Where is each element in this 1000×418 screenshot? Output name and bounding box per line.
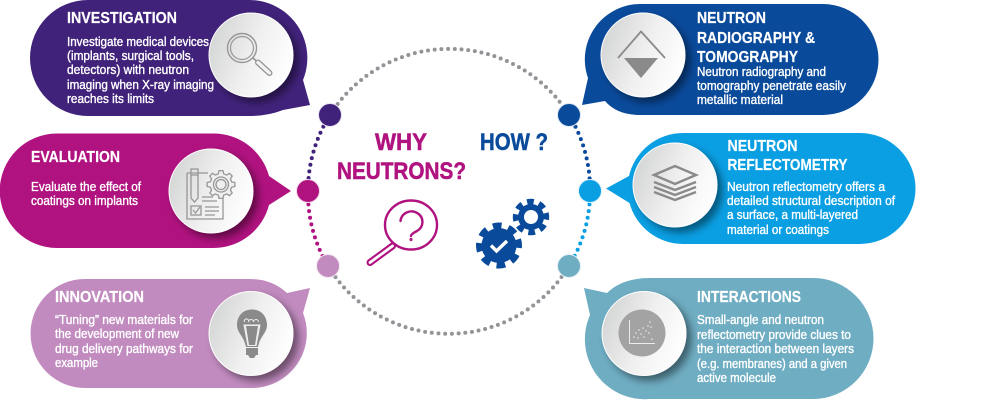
text: innovation body: “Tuning” new materials for	[55, 313, 193, 327]
text: reflectometry body: a surface, a multi-layered	[727, 208, 858, 222]
icon: magnifier with question mark	[370, 200, 437, 262]
text: investigation body	[67, 35, 214, 106]
icon: light bulb	[237, 310, 267, 358]
panel: evaluation	[0, 133, 291, 248]
text: interactions body: reflectometry provide clues to	[697, 328, 851, 342]
heading: reflectometry: NEUTRON	[728, 138, 798, 155]
text: interactions body: (e.g. membranes) and a given	[697, 357, 847, 371]
text: evaluation body	[31, 180, 141, 208]
panel: interactions	[584, 278, 873, 399]
heading: reflectometry: REFLECTOMETRY	[728, 157, 848, 174]
panel: innovation	[31, 279, 310, 388]
text: investigation body: detectors) with neutron	[67, 63, 189, 77]
heading: radiography and tomography: RADIOGRAPHY &	[697, 30, 815, 47]
node: evaluation	[296, 180, 320, 202]
text: innovation body: drug delivery pathways for	[55, 342, 193, 356]
icon: checklist and gear	[187, 169, 235, 219]
heading: how: HOW ?	[480, 129, 548, 156]
text: interactions body	[697, 313, 854, 385]
heading: radiography and tomography	[697, 10, 815, 66]
text: interactions body: active molecule	[697, 371, 776, 385]
icon: diamond triangles	[618, 32, 665, 78]
disc: interactions	[602, 292, 686, 376]
icon: gears with check mark	[474, 199, 549, 270]
heading: why neutrons: WHY	[375, 129, 427, 156]
heading: why neutrons	[337, 129, 466, 185]
text: innovation body	[55, 313, 193, 370]
text: innovation body: example	[55, 356, 98, 370]
icon: stacked layers	[654, 166, 696, 200]
heading: radiography and tomography: NEUTRON	[697, 10, 766, 27]
text: reflectometry body	[727, 180, 895, 237]
disc: radiography	[601, 13, 685, 97]
disc: innovation	[209, 292, 293, 376]
text: investigation body: imaging when X-ray imaging	[67, 78, 214, 92]
disc: reflectometry	[633, 143, 717, 227]
node: reflectometry	[578, 180, 602, 202]
text: radiography body: tomography penetrate easily	[697, 79, 847, 93]
heading: investigation: INVESTIGATION	[67, 10, 177, 27]
node: radiography	[558, 104, 580, 126]
text: radiography body	[697, 65, 847, 107]
node: interactions	[558, 254, 580, 278]
text: innovation body: the development of new	[55, 327, 180, 341]
dotted ring	[308, 49, 590, 334]
text: reflectometry body: detailed structural description of	[727, 194, 895, 208]
panel: radiography and tomography	[582, 4, 878, 115]
text: radiography body: metallic material	[697, 93, 783, 107]
node: innovation	[316, 254, 340, 278]
text: evaluation body: coatings on implants	[31, 194, 138, 208]
panel: investigation	[30, 0, 310, 116]
text: interactions body: Small-angle and neutron	[697, 313, 824, 327]
text: investigation body: reaches its limits	[67, 92, 154, 106]
heading: reflectometry	[728, 138, 848, 174]
heading: radiography and tomography: TOMOGRAPHY	[697, 49, 799, 66]
disc: evaluation	[169, 149, 253, 233]
disc: investigation	[209, 13, 293, 97]
text: reflectometry body: Neutron reflectometry offers a	[727, 180, 885, 194]
text: interactions body: the interaction between layers	[697, 342, 854, 356]
text: investigation body: Investigate medical devices	[67, 35, 209, 49]
text: evaluation body: Evaluate the effect of	[31, 180, 141, 194]
text: reflectometry body: material or coatings	[727, 223, 829, 237]
node: investigation	[318, 104, 342, 126]
heading: evaluation: EVALUATION	[31, 149, 120, 166]
heading: why neutrons: NEUTRONS?	[337, 158, 466, 185]
heading: innovation: INNOVATION	[55, 289, 144, 306]
panel: reflectometry	[606, 133, 915, 244]
text: investigation body: (implants, surgical tools,	[67, 49, 194, 63]
icon: magnifying glass	[228, 34, 270, 73]
text: radiography body: Neutron radiography and	[697, 65, 826, 79]
heading: interactions: INTERACTIONS	[697, 289, 801, 306]
icon: scatter plot	[618, 310, 666, 356]
